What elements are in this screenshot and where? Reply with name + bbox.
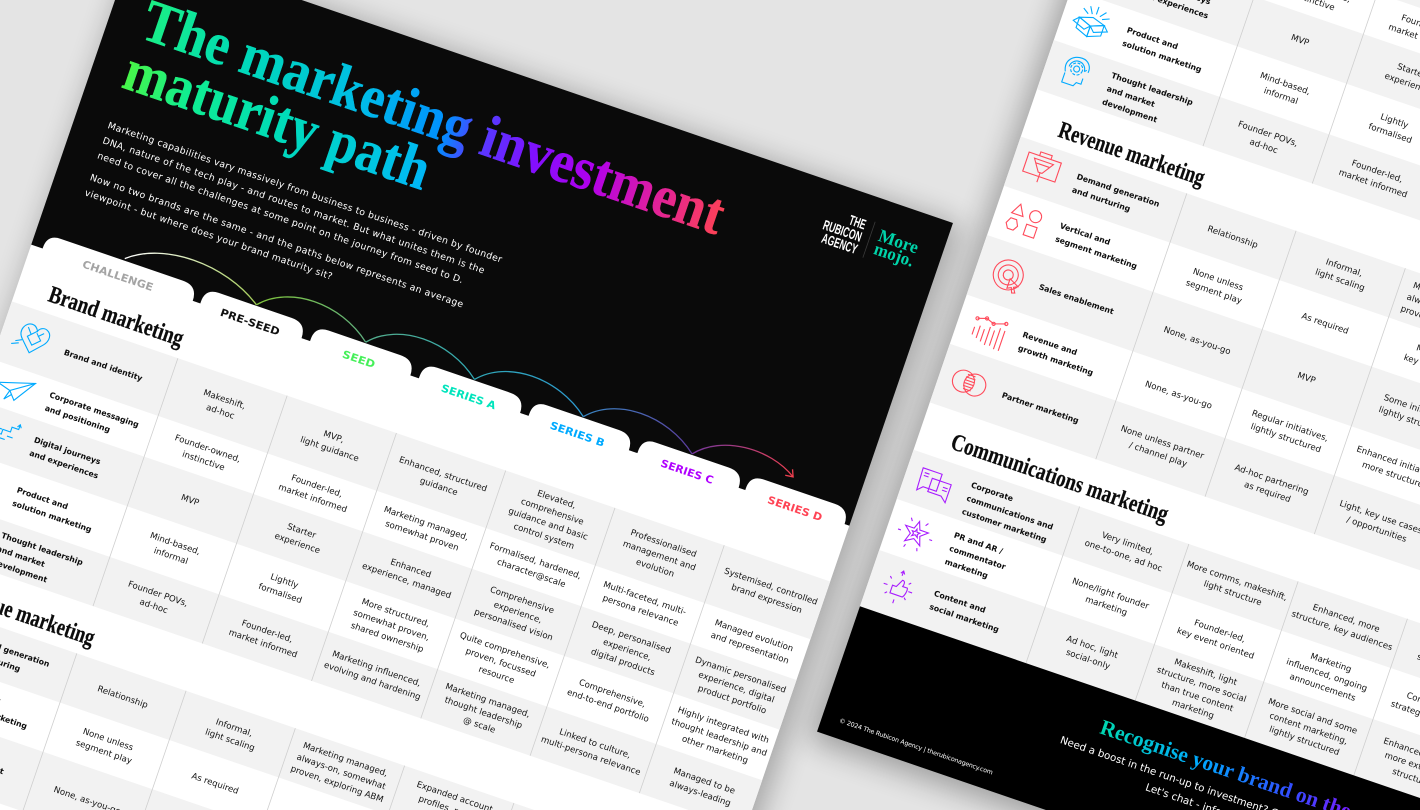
white table sheet with tabs [0, 230, 854, 810]
communications marketing rows: Content and [933, 589, 987, 615]
revenue marketing rows: Revenue and [1021, 330, 1078, 357]
revenue marketing table rows: proven, exploring ABM [289, 764, 384, 805]
communications marketing rows: commentator [948, 544, 1007, 572]
logo: The Rubicon Agency, More mojo: AGENCY [820, 230, 860, 257]
stage tab labels: SERIES A [439, 383, 498, 413]
brand marketing table rows: Enhanced, structured [398, 455, 488, 495]
brand marketing table rows: Founder-led, [240, 618, 294, 645]
brand marketing table rows: Marketing influenced, [331, 649, 422, 689]
brand marketing table rows: management and [621, 539, 697, 573]
brand marketing table rows: somewhat proven, [352, 608, 431, 643]
revenue marketing rows: and nurturing [1071, 185, 1132, 214]
icon: speech bubbles [915, 468, 953, 503]
brand marketing table rows: experience, digital [697, 670, 776, 705]
logo: The Rubicon Agency, More mojo: More [876, 225, 921, 257]
icon: thought head with cog [1060, 54, 1092, 89]
brand marketing table rows: MVP, [322, 429, 345, 446]
brand marketing table rows: Deep, personalised [590, 620, 672, 656]
revenue marketing rows: Demand generation [1075, 172, 1161, 209]
revenue marketing rows: None unless partner [1119, 424, 1206, 462]
brand marketing table rows: Product and [16, 485, 69, 511]
brand marketing rows continued: Thought leadership [1110, 71, 1195, 107]
brand marketing rows continued: Founder POVs, [1236, 120, 1299, 149]
brand marketing table rows: Comprehensive, [577, 678, 647, 710]
brand marketing table rows: Founder-owned, [173, 433, 242, 465]
communications marketing rows: marketing [1171, 698, 1215, 722]
brand marketing table rows: Lightly [269, 572, 300, 591]
revenue marketing table rows: light scaling [204, 728, 256, 754]
brand marketing table rows: Elevated, [536, 489, 577, 511]
communications marketing rows: customer marketing [961, 507, 1048, 544]
communications marketing rows: Marketing [1309, 652, 1353, 675]
intro text: DNA, nature of the tech play - and routes to market. But what unites them is the [101, 135, 486, 276]
brand marketing table rows: and experiences [28, 449, 100, 481]
revenue marketing rows: Partner marketing [1001, 391, 1080, 425]
revenue marketing rows: light scaling [1314, 268, 1366, 294]
intro text: viewpoint - but where does your brand maturity sit? [83, 187, 334, 282]
communications marketing rows: PR and AR / [953, 531, 1004, 556]
icon: growth bars [968, 313, 1008, 351]
brand marketing table rows: Starter [286, 522, 318, 541]
icon: paper plane [0, 372, 36, 407]
brand marketing rows continued: Product and [1126, 25, 1179, 51]
brand marketing table rows: experience, [601, 638, 652, 663]
brand marketing table rows: proven, focussed [464, 647, 537, 680]
right document page (continuation of the table) [808, 0, 1420, 810]
revenue marketing rows: / opportunities [1345, 515, 1408, 545]
brand marketing table rows: thought leadership [443, 695, 524, 731]
brand marketing table rows: Marketing managed, [382, 505, 470, 543]
revenue marketing table rows: Marketing managed, [302, 741, 389, 779]
communications marketing rows: Ad hoc, light [1065, 634, 1120, 661]
brand marketing table rows: Quite comprehensive, [458, 631, 551, 671]
revenue marketing table rows [0, 626, 494, 810]
brand marketing rows continued: Founder-led, [1350, 158, 1404, 185]
brand marketing table rows: formalised [257, 582, 303, 606]
revenue marketing rows: as required [1243, 480, 1292, 505]
communications marketing rows: social marketing [928, 602, 1000, 634]
brand marketing table rows: guidance and basic [507, 506, 589, 543]
logo: The Rubicon Agency, More mojo [817, 204, 922, 275]
brand marketing table rows: Marketing managed, [444, 682, 531, 720]
brand marketing table rows: @ scale [462, 715, 497, 736]
brand marketing table rows: experience, [492, 600, 543, 626]
brand marketing table rows: More structured, [360, 597, 431, 630]
brand marketing table rows: somewhat proven [384, 519, 460, 554]
revenue marketing rows: Vertical and [1059, 221, 1111, 247]
brand marketing table rows: instinctive [181, 450, 226, 473]
brand marketing table rows: Managed to be [672, 766, 736, 797]
stage tab labels: CHALLENGE [81, 259, 155, 294]
brand marketing table rows: Managed evolution [713, 618, 794, 654]
brand marketing table rows: Linked to culture, [558, 727, 632, 761]
brand marketing table rows: Comprehensive [488, 585, 555, 616]
brand marketing table rows: persona relevance [601, 594, 680, 629]
stage tab labels [80, 259, 824, 524]
communications marketing rows: content marketing, [1268, 711, 1349, 747]
revenue marketing heading: Revenue marketing [1055, 117, 1208, 191]
brand marketing table rows: end-to-end portfolio [566, 688, 650, 725]
brand marketing rows continued: ad-hoc [1248, 137, 1279, 156]
revenue marketing rows: Ad-hoc partnering [1233, 463, 1310, 498]
brand marketing table rows: Enhanced [389, 557, 432, 581]
revenue marketing table rows: As required [190, 771, 240, 797]
brand marketing table rows: Founder-led, [290, 473, 344, 500]
brand marketing rows continued: and market [1106, 84, 1156, 109]
brand marketing table rows: comprehensive [519, 497, 585, 528]
intro text [83, 120, 503, 333]
revenue marketing table rows: Relationship [96, 684, 149, 711]
brand marketing table rows: Dynamic personalised [694, 655, 787, 696]
communications marketing rows: Corporate [970, 481, 1014, 503]
brand marketing table rows: Formalised, hardened, [488, 541, 582, 582]
icon: heart knot [10, 320, 52, 357]
brand marketing rows continued: MVP [1289, 33, 1310, 49]
brand marketing rows continued: formalised [1367, 122, 1413, 146]
brand marketing rows continued [1101, 0, 1420, 209]
brand marketing table rows: control system [512, 522, 575, 552]
brand marketing heading: Brand marketing [45, 282, 187, 352]
brand marketing table rows: shared ownership [349, 621, 425, 655]
footer call-to-action band [817, 606, 1420, 810]
brand marketing table rows: evolving and hardening [322, 660, 422, 703]
left document page [0, 0, 961, 810]
brand marketing table rows: informal [152, 546, 189, 567]
intro text: need to cover all the challenges at some point on the journey from seed to D. [96, 151, 465, 286]
footer call-to-action band: © 2024 The Rubicon Agency | therubiconagency.com [838, 716, 994, 777]
revenue marketing rows [998, 166, 1420, 550]
journey arcs with arrow [124, 237, 797, 487]
grey table rows [860, 0, 1420, 810]
brand marketing table rows: market informed [277, 483, 348, 515]
stage tab labels: SERIES C [659, 458, 715, 487]
brand marketing table rows: Digital journeys [33, 435, 102, 467]
brand marketing rows continued: development [1101, 97, 1159, 125]
brand marketing table rows: Mind-based, [148, 531, 201, 558]
icon: target and cursor [989, 256, 1027, 295]
brand marketing rows continued: solution marketing [1121, 39, 1203, 74]
icon: overlapping circles [949, 367, 989, 399]
revenue marketing rows: / channel play [1128, 441, 1188, 470]
revenue marketing rows: None unless [1191, 267, 1245, 294]
stage tab labels: SEED [341, 349, 377, 371]
communications marketing rows: structure, key audiences [1290, 609, 1394, 653]
brand marketing table rows [0, 329, 824, 810]
communications marketing rows: More social and some [1267, 697, 1358, 737]
brand marketing rows continued: Mind-based, [1258, 71, 1311, 98]
brand marketing table rows: evolution [634, 557, 675, 580]
revenue marketing rows: Regular initiatives, [1250, 409, 1330, 444]
revenue marketing table rows: Informal, [214, 717, 254, 739]
revenue marketing rows: None, as-you-go [1162, 325, 1232, 357]
revenue marketing table rows: always-on, somewhat [295, 753, 387, 792]
communications marketing rows: communications and [965, 494, 1054, 532]
brand marketing table rows: guidance [418, 476, 459, 498]
icon: shapes [1004, 202, 1044, 238]
brand marketing rows continued: informal [1262, 86, 1299, 107]
brand marketing table rows: personalised vision [473, 607, 554, 643]
icon: digital steps [0, 416, 22, 453]
brand marketing table rows: brand expression [730, 583, 803, 616]
stage tab labels: SERIES B [548, 420, 606, 450]
communications marketing rows: than true content [1160, 680, 1235, 715]
brand marketing rows continued: market informed [1337, 168, 1408, 201]
icon: funnel on board [1021, 148, 1063, 188]
revenue marketing rows: Relationship [1206, 224, 1259, 251]
communications marketing rows [924, 481, 1420, 804]
communications marketing rows: light structure [1202, 579, 1263, 608]
brand marketing table rows: Corporate messaging [48, 390, 140, 429]
brand marketing table rows: Professionalised [629, 528, 698, 560]
brand marketing table rows: Multi-faceted, multi- [602, 580, 687, 618]
communications marketing rows: key event oriented [1175, 626, 1255, 662]
revenue marketing rows: MVP [1296, 371, 1317, 386]
brand marketing table rows: thought leadership and [670, 717, 768, 759]
brand marketing table rows: digital products [589, 647, 657, 678]
revenue marketing rows: lightly structured [1249, 422, 1322, 455]
brand marketing table rows: Founder POVs, [126, 580, 189, 609]
logo: The Rubicon Agency, More mojo: mojo. [871, 239, 917, 271]
communications marketing rows: Founder-led, [1193, 618, 1247, 645]
logo: The Rubicon Agency, More mojo: RUBICON [821, 217, 864, 245]
communications marketing rows: Very limited, [1100, 531, 1155, 558]
revenue marketing rows: segment play [1184, 278, 1243, 307]
brand marketing table rows: character@scale [495, 557, 567, 590]
grey table rows [0, 301, 830, 810]
brand marketing table rows: and representation [709, 631, 790, 667]
communications marketing rows: influenced, ongoing [1285, 657, 1368, 694]
stage tab labels: PRE-SEED [219, 307, 281, 338]
revenue marketing rows: None, as-you-go [1144, 379, 1213, 412]
brand marketing table rows: solution marketing [11, 499, 93, 534]
brand marketing table rows: Makeshift, [202, 388, 247, 412]
brand marketing table rows: resource [477, 665, 515, 686]
brand marketing table rows: MVP [179, 493, 200, 509]
communications marketing rows: announcements [1288, 672, 1357, 704]
brand marketing table rows: market informed [227, 628, 298, 661]
revenue marketing rows: As required [1300, 311, 1350, 337]
brand marketing table rows: always-leading [668, 779, 732, 809]
icon: open box [1070, 0, 1114, 42]
brand marketing table rows: multi-persona relevance [540, 735, 642, 778]
intro text: Now no two brands are the same - and the paths below represents an average [88, 172, 465, 310]
black header panel [31, 0, 953, 526]
title: maturity path [116, 37, 439, 203]
communications marketing rows: None/light founder [1071, 576, 1151, 612]
communications marketing heading: Communications marketing [948, 429, 1172, 528]
icon: thumbs up with arrows [879, 566, 918, 608]
revenue marketing rows: segment marketing [1054, 235, 1138, 271]
brand marketing table rows: other marketing [680, 734, 749, 766]
stage tab labels: SERIES D [766, 494, 824, 524]
brand marketing table rows: light guidance [299, 435, 360, 464]
brand marketing table rows: and positioning [44, 404, 111, 434]
brand marketing table rows: experience [273, 531, 321, 556]
icon: star burst [893, 515, 937, 555]
brand marketing table rows: Highly integrated with [676, 705, 770, 746]
brand marketing table rows: experience, managed [361, 561, 452, 601]
communications marketing rows: marketing [944, 557, 989, 580]
brand marketing table rows: ad-hoc [205, 403, 236, 422]
communications marketing rows: More comms, makeshift, [1185, 560, 1288, 603]
brand marketing table rows: Brand and identity [63, 348, 144, 383]
communications marketing rows: one-to-one, ad hoc [1083, 538, 1164, 574]
intro text: Marketing capabilities vary massively from business to business - driven by founder [106, 120, 503, 266]
brand marketing rows continued: Lightly [1379, 112, 1410, 131]
revenue marketing rows: growth marketing [1017, 343, 1094, 377]
communications marketing rows: social-only [1064, 648, 1111, 672]
communications marketing rows: Makeshift, light [1173, 657, 1239, 688]
brand marketing table rows: Systemised, controlled [723, 566, 819, 608]
revenue marketing rows: Informal, [1324, 257, 1364, 279]
brand marketing table rows: Thought leadership [0, 531, 85, 567]
revenue marketing table rows: None unless [81, 727, 135, 754]
revenue marketing table rows: segment play [74, 738, 133, 767]
brand marketing table rows: product portfolio [696, 684, 768, 716]
logo: The Rubicon Agency, More mojo: THE [847, 212, 868, 232]
communications marketing rows: Enhanced, more [1311, 603, 1381, 635]
communications marketing rows: structure, more social [1155, 665, 1247, 705]
communications marketing rows: marketing [1084, 595, 1128, 618]
brand marketing table rows: ad-hoc [138, 597, 169, 616]
communications marketing rows: lightly structured [1268, 725, 1341, 758]
revenue marketing rows: Sales enablement [1038, 282, 1115, 316]
